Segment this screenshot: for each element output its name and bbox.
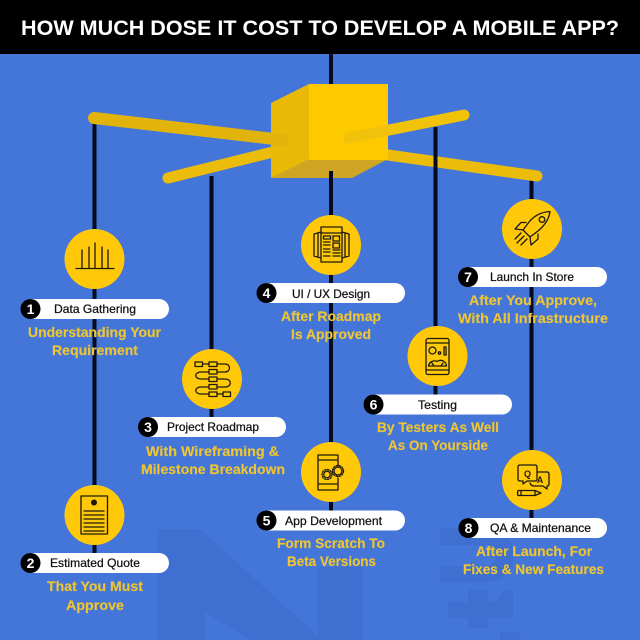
label pill xyxy=(458,267,607,287)
description: Form Scratch To xyxy=(277,535,385,551)
label pill xyxy=(364,394,512,414)
label pill xyxy=(20,553,169,573)
description: By Testers As Well xyxy=(377,419,499,435)
title bar xyxy=(0,0,640,54)
description: Understanding Your xyxy=(28,324,162,340)
label pill: UI / UX Design xyxy=(292,287,370,301)
watermark letters xyxy=(158,528,520,640)
icon: rocket xyxy=(502,199,562,259)
description xyxy=(277,535,385,569)
description: Requirement xyxy=(52,342,138,358)
description: With Wireframing & xyxy=(146,443,279,459)
label pill xyxy=(256,283,405,303)
label pill xyxy=(458,518,607,538)
label pill xyxy=(138,417,286,437)
step 6: testing xyxy=(364,326,512,453)
description: Beta Versions xyxy=(287,553,376,569)
label pill: 6 xyxy=(370,396,378,412)
icon: tablet dashboard xyxy=(408,326,468,386)
label pill: 5 xyxy=(263,512,271,528)
description: With All Infrastructure xyxy=(458,310,608,326)
step 1: data gathering xyxy=(20,229,169,358)
label pill: Project Roadmap xyxy=(167,420,259,434)
label pill: QA & Maintenance xyxy=(490,521,591,535)
step 2: estimated quote xyxy=(20,485,169,613)
label pill: 2 xyxy=(27,555,35,571)
label pill: Data Gathering xyxy=(54,302,136,316)
icon: quote document xyxy=(64,485,124,545)
title bar: HOW MUCH DOSE IT COST TO DEVELOP A MOBILE APP? xyxy=(21,17,619,40)
icon: q and a bubbles with pencil: A xyxy=(537,475,544,485)
description xyxy=(463,543,604,577)
step 8: qa and maintenance xyxy=(458,450,607,577)
step 3: project roadmap xyxy=(138,349,286,477)
step 5: app development xyxy=(256,442,405,569)
label pill: 3 xyxy=(144,419,152,435)
description: After Launch, For xyxy=(476,543,593,559)
description xyxy=(47,578,143,613)
description: Fixes & New Features xyxy=(463,561,604,577)
description: As On Yourside xyxy=(388,437,488,453)
label pill xyxy=(20,299,169,319)
label pill: Estimated Quote xyxy=(50,556,140,570)
description: Milestone Breakdown xyxy=(141,461,285,477)
description: That You Must xyxy=(47,578,143,594)
label pill: Testing xyxy=(418,398,457,412)
icon: q and a bubbles with pencil xyxy=(502,450,562,510)
label pill: 4 xyxy=(263,285,271,301)
hanging strings xyxy=(94,54,532,553)
label pill: Launch In Store xyxy=(490,270,574,284)
label pill: App Development xyxy=(285,514,383,528)
description xyxy=(28,324,162,358)
icon: phone with gears xyxy=(301,442,361,502)
description: After Roadmap xyxy=(281,308,381,324)
icon: wireframe screens xyxy=(301,215,361,275)
icon: flow roadmap xyxy=(182,349,242,409)
label pill: 7 xyxy=(464,269,472,285)
mobile cube hub with arms xyxy=(94,84,537,180)
description: Is Approved xyxy=(291,326,371,342)
description: After You Approve, xyxy=(469,292,597,308)
icon: bar signal xyxy=(64,229,124,289)
step 4: ui / ux design xyxy=(256,215,405,342)
step 7: launch in store xyxy=(458,199,608,326)
description: Approve xyxy=(66,597,124,613)
label pill xyxy=(256,510,405,530)
label pill: 8 xyxy=(465,520,473,536)
description xyxy=(377,419,499,453)
description xyxy=(281,308,381,342)
icon: q and a bubbles with pencil: Q xyxy=(524,469,531,479)
description xyxy=(458,292,608,326)
label pill: 1 xyxy=(27,301,35,317)
description xyxy=(141,443,285,477)
